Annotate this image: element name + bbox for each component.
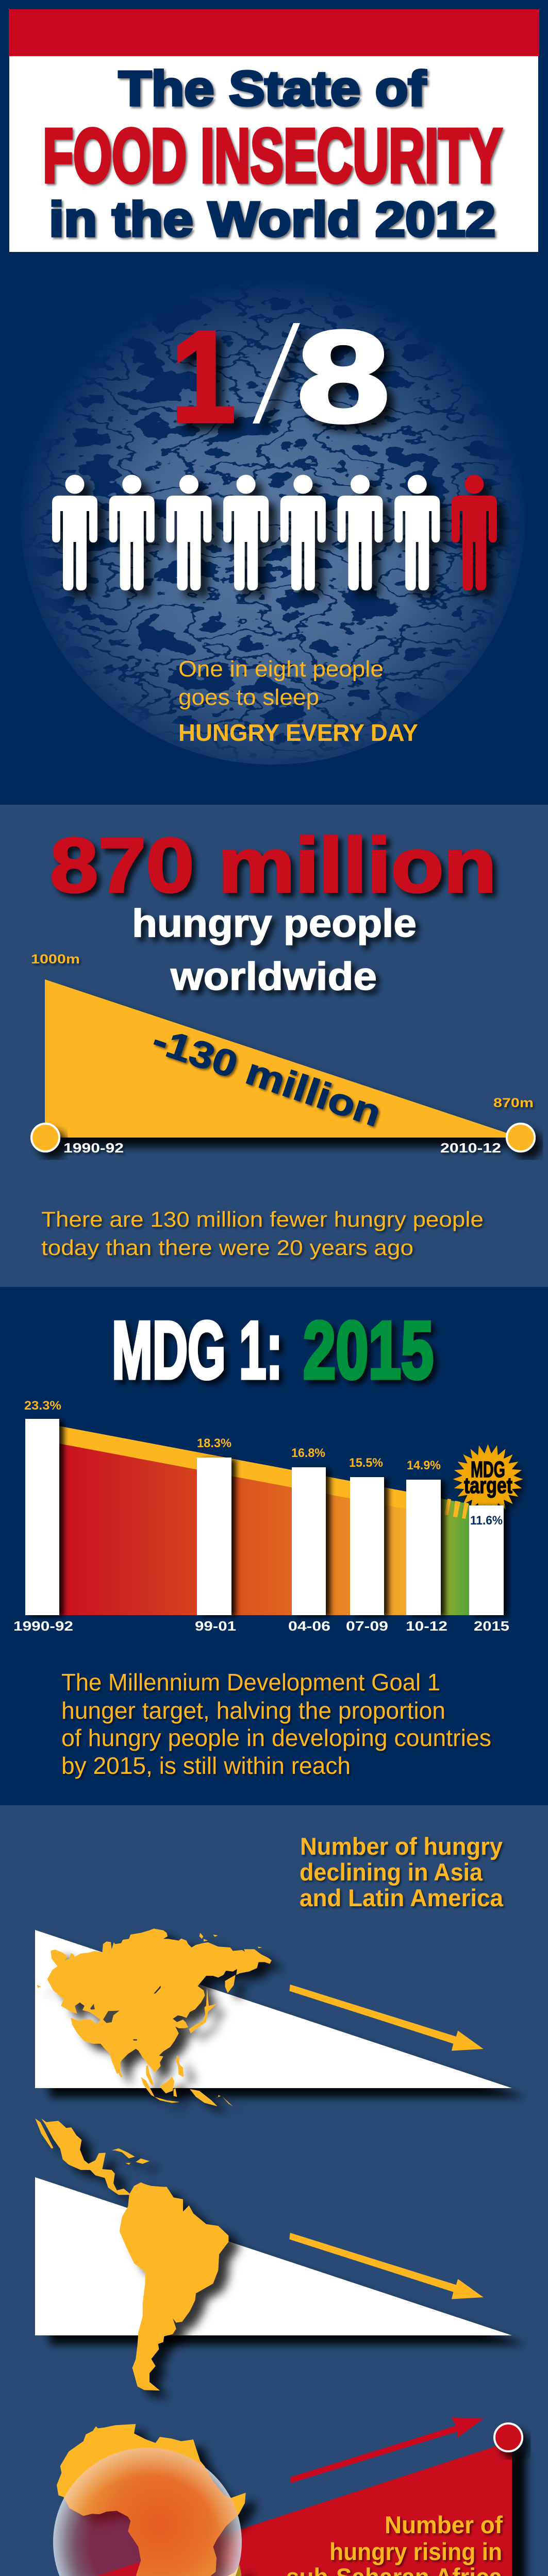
icon: person: [337, 475, 383, 590]
paragraph: MDG target: hunger target, halving the proportion: [61, 1697, 445, 1724]
axis labels: 1990-92: [13, 1618, 73, 1634]
heading: number of hungry declining: Number of hungry: [300, 1833, 503, 1860]
panel: regional trends: [0, 1805, 548, 2576]
panel: MDG 1 2015: [0, 1287, 548, 1805]
caption: one in eight people: One in eight people: [178, 656, 384, 682]
value labels: 18.3%: [197, 1436, 231, 1450]
globe illustration: [27, 290, 519, 765]
map: Asia: [37, 1928, 272, 2106]
rising wedge: sub-Saharan Africa: [35, 2441, 512, 2576]
bar 07-09: [350, 1477, 384, 1615]
callout: number of hungry rising: hungry rising in: [329, 2538, 502, 2565]
icon: person: [223, 475, 269, 590]
arrow: Africa rising: [290, 2417, 484, 2483]
marker: start: [31, 1124, 59, 1151]
title line: The State of: The State of: [119, 61, 426, 116]
axis labels: 04-06: [288, 1618, 330, 1634]
axis labels: 99-01: [195, 1618, 236, 1634]
marker: end: [507, 1124, 535, 1151]
triangle chart: [31, 952, 535, 1156]
bar 10-12: [406, 1480, 441, 1615]
panel: 870 million: [0, 805, 548, 1287]
value label: 870m: 870m: [493, 1096, 534, 1110]
bar 99-01: [197, 1458, 231, 1615]
heading: number of hungry declining: and Latin America: [300, 1884, 504, 1911]
caption: one in eight people: [178, 656, 418, 746]
fraction 1/8: 8: [297, 304, 390, 449]
arrow: Asia decline: [289, 1985, 484, 2050]
icon: person: [166, 475, 211, 590]
heading: MDG 1: 2015: MDG 1:: [112, 1305, 283, 1396]
fraction 1/8: [171, 304, 390, 449]
target badge: MDG: [471, 1457, 505, 1482]
bar 2015: [469, 1505, 504, 1615]
label: -130 million: -130 million: [147, 1019, 386, 1134]
gradient area: [59, 1426, 469, 1615]
axis labels: [13, 1618, 509, 1634]
icon: person: [109, 475, 155, 590]
icon: person: [52, 475, 97, 590]
subheading: hungry people worldwide: hungry people: [132, 902, 417, 945]
bar 04-06: [292, 1467, 326, 1615]
white declining wedge: Asia: [35, 1930, 512, 2088]
axis label: 1990-92: 1990-92: [63, 1140, 124, 1156]
value labels: 15.5%: [349, 1456, 383, 1470]
paragraph: MDG target: [61, 1669, 491, 1779]
value labels: 16.8%: [291, 1446, 325, 1460]
marker: rising end: [494, 2424, 522, 2451]
title banner: [9, 9, 539, 252]
row of eight people icons: [52, 475, 497, 590]
callout: number of hungry rising: Number of: [385, 2511, 503, 2538]
target badge: [453, 1444, 523, 1514]
paragraph: MDG target: of hungry people in developing countries: [61, 1724, 491, 1751]
caption: one in eight people: goes to sleep: [178, 685, 319, 710]
caption: 130 million fewer: [41, 1207, 484, 1260]
white declining wedge: Latin America: [35, 2177, 512, 2335]
panel: title and one in eight: [0, 0, 548, 805]
paragraph: MDG target: The Millennium Development Goal 1: [61, 1669, 440, 1696]
fraction 1/8: 1: [171, 304, 236, 449]
icon: person: [280, 475, 326, 590]
bar 1990-92: [25, 1419, 59, 1615]
target badge: target: [464, 1473, 512, 1498]
map: Latin America: [35, 2119, 228, 2391]
axis labels: 10-12: [406, 1618, 447, 1634]
value labels: 11.6%: [470, 1514, 503, 1528]
axis labels: 2015: [474, 1618, 509, 1634]
caption: one in eight people: HUNGRY EVERY DAY: [178, 719, 418, 746]
map: Africa with lens: [53, 2424, 246, 2576]
value label: 1000m: 1000m: [31, 952, 80, 967]
icon: red person: [452, 475, 497, 590]
heading: 870 million: 870 million: [50, 822, 496, 908]
icon: person: [394, 475, 440, 590]
caption: 130 million fewer: today than there were 20 years ago: [41, 1235, 413, 1260]
caption: 130 million fewer: There are 130 million fewer hungry people: [41, 1207, 484, 1231]
heading: MDG 1: 2015: 2015: [303, 1305, 434, 1396]
heading: number of hungry declining: declining in Asia: [300, 1858, 483, 1886]
subheading: hungry people worldwide: worldwide: [170, 955, 377, 998]
axis label: 2010-12: 2010-12: [440, 1140, 501, 1156]
callout: number of hungry rising: [286, 2511, 503, 2576]
value labels: 23.3%: [24, 1399, 61, 1413]
heading: number of hungry declining: [300, 1833, 504, 1911]
bar chart: undernourishment trend: [13, 1399, 523, 1634]
subheading: hungry people worldwide: [132, 902, 417, 998]
value labels: 14.9%: [407, 1459, 441, 1472]
paragraph: MDG target: by 2015, is still within reach: [61, 1752, 351, 1779]
title line: in the World 2012: in the World 2012: [49, 192, 495, 247]
axis labels: 07-09: [346, 1618, 388, 1634]
arrow: Latin America decline: [289, 2233, 484, 2299]
value labels: [24, 1399, 503, 1528]
